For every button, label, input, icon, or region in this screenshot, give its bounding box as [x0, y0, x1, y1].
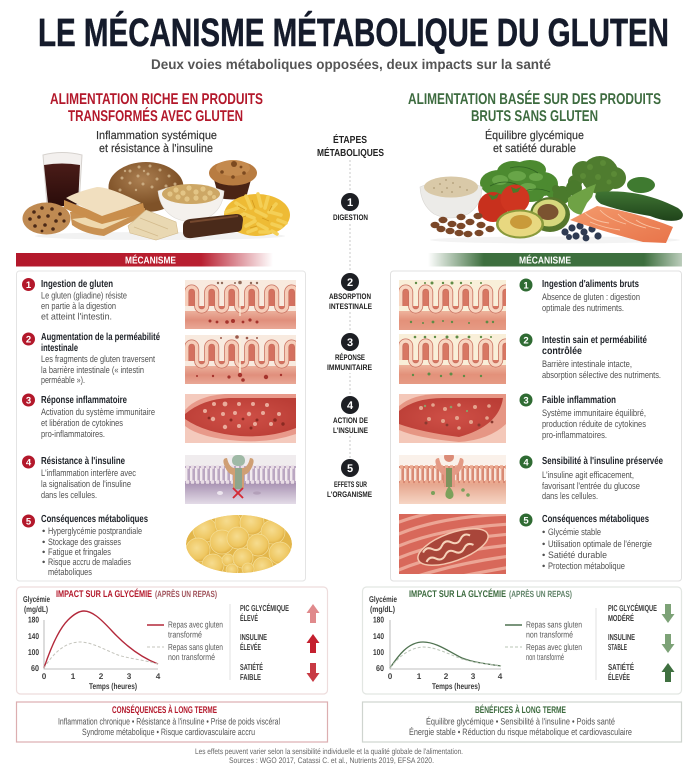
step 4 insulin action: ACTION DE: [333, 416, 369, 425]
step 5: metabolic consequences: Hyperglycémie postprandiale: [48, 525, 142, 536]
step 5: metabolic consequences: [520, 514, 652, 571]
line chart: glycemia curve: 0: [42, 672, 47, 681]
line chart: glycemia curve: 140: [28, 631, 39, 641]
step 3: inflammatory response: 3: [26, 396, 31, 406]
step 4: preserved insulin sensitivity: dans les cellules.: [542, 490, 598, 501]
chart legend: non transformé: [168, 652, 215, 662]
indicator: low satiety: SATIÉTÉ: [240, 662, 263, 672]
panel: gluten-free mechanism: [390, 271, 682, 586]
chart legend: [147, 620, 223, 662]
chart title: (APRÈS UN REPAS): [509, 589, 572, 599]
step 1 digestion: DIGESTION: [333, 213, 368, 222]
line chart: glycemia curve: 4: [156, 672, 161, 681]
step 3 immune response: IMMUNITAIRE: [327, 363, 373, 372]
indicator: moderate glycemic peak: PIC GLYCÉMIQUE: [608, 603, 657, 613]
step 4: preserved insulin sensitivity: Sensibilité à l'insuline préservée: [542, 456, 663, 467]
line chart: glycemia curve: 0: [388, 672, 393, 681]
indicator: stable insulin: INSULINE: [608, 632, 635, 642]
step 2: increased permeability: intestinale: [41, 343, 78, 354]
step 5 effects on the body: L'ORGANISME: [327, 490, 373, 499]
step 4 insulin action: 4: [347, 400, 354, 412]
step 3: low inflammation: 3: [523, 396, 529, 406]
line chart: glycemia curve: (mg/dL): [24, 604, 48, 614]
right mechanism banner: [428, 253, 682, 266]
chart title: (APRÈS UN REPAS): [155, 589, 217, 599]
line chart: glycemia curve: 100: [28, 647, 39, 657]
left column subheading: Inflammation systémique: [96, 129, 217, 142]
illustration: intact barrier: [399, 334, 511, 384]
step 3 immune response: RÉPONSE: [335, 352, 366, 362]
line chart: glycemia curve: 3: [127, 672, 132, 681]
step 2: increased permeability: [22, 332, 160, 385]
indicator: low satiety: FAIBLE: [240, 672, 261, 682]
chart legend: Repas sans gluten: [526, 620, 582, 630]
step 1: gluten ingestion: [22, 278, 127, 322]
step 3 immune response: [325, 332, 375, 373]
step 3: inflammatory response: et libération de cytokines: [41, 417, 123, 428]
right column subheading: et satiété durable: [493, 142, 576, 155]
line chart: glycemia curve: Temps (heures): [432, 681, 480, 691]
right mechanism banner: MÉCANISME: [519, 254, 571, 266]
indicator: high insulin: ÉLEVÉE: [240, 642, 261, 652]
line chart: glycemia curve: [23, 594, 223, 691]
step 4 insulin action: [325, 395, 375, 436]
step 4: preserved insulin sensitivity: favorisant l'entrée du glucose: [542, 480, 640, 491]
chart legend: Repas avec gluten: [526, 642, 582, 652]
indicator: high insulin: INSULINE: [240, 632, 267, 642]
step 3: low inflammation: Système immunitaire équilibré,: [542, 407, 646, 418]
step 1: whole foods: 1: [523, 280, 529, 292]
step 4: insulin resistance: L'inflammation interfère avec: [41, 467, 136, 478]
illustration: whole gluten-free foods: [420, 156, 683, 244]
step 4 insulin action: L'INSULINE: [333, 426, 369, 435]
step 4: insulin resistance: Résistance à l'insuline: [41, 456, 125, 467]
illustration: muscle with mitochondrion: [399, 514, 506, 574]
step 3 immune response: 3: [347, 337, 353, 349]
right column heading: BRUTS SANS GLUTEN: [471, 108, 598, 125]
indicator: high glycemic peak: PIC GLYCÉMIQUE: [240, 603, 289, 613]
illustration: processed foods with gluten: [22, 152, 290, 240]
step 5: metabolic consequences: •: [542, 538, 545, 549]
step 2: controlled permeability: [520, 334, 661, 380]
indicator: high satiety: SATIÉTÉ: [608, 662, 634, 672]
line chart: glycemia curve: 2: [444, 672, 449, 681]
step 5: metabolic consequences: •: [42, 525, 45, 536]
step 1: gluten ingestion: et atteint l'intestin.: [41, 310, 112, 322]
step 5 effects on the body: [325, 458, 375, 500]
step 5: metabolic consequences: •: [542, 549, 545, 560]
step 5 effects on the body: EFFETS SUR: [334, 480, 367, 489]
line chart: glycemia curve: 140: [373, 631, 384, 641]
steps column heading: MÉTABOLIQUES: [317, 146, 384, 159]
step 4: preserved insulin sensitivity: 4: [523, 458, 529, 468]
indicator: stable insulin: [608, 632, 674, 653]
step 5: metabolic consequences: •: [42, 536, 45, 547]
step 3: low inflammation: [520, 394, 646, 440]
left mechanism banner: MÉCANISME: [125, 254, 176, 266]
step 5 effects on the body: 5: [347, 463, 353, 475]
step 2: controlled permeability: Barrière intestinale intacte,: [542, 358, 632, 369]
callout: long-term consequences: [16, 702, 328, 742]
chart legend: Repas sans gluten: [168, 642, 223, 652]
callout: long-term benefits: BÉNÉFICES À LONG TERME: [475, 704, 566, 716]
step 1 digestion: 1: [347, 197, 353, 209]
callout: long-term consequences: Syndrome métabolique • Risque cardiovasculaire accru: [82, 727, 255, 737]
illustration: healthy villi with nutrients: [399, 280, 511, 330]
footer note and sources: [195, 747, 463, 765]
step 3: inflammatory response: Activation du système immunitaire: [41, 406, 155, 417]
callout: long-term consequences: Inflammation chronique • Résistance à l'insuline • Prise de poids viscéral: [58, 716, 280, 726]
step 5: metabolic consequences: Risque accru de maladies: [48, 556, 131, 567]
step 1: whole foods: optimale des nutriments.: [542, 302, 624, 313]
left column subheading: [96, 129, 217, 155]
step 5: metabolic consequences: Glycémie stable: [548, 526, 601, 537]
step 1 digestion: [325, 190, 375, 224]
step 2: increased permeability: Les fragments de gluten traversent: [41, 353, 155, 364]
illustration: fat cells: [186, 515, 292, 573]
step 1: gluten ingestion: Ingestion de gluten: [41, 279, 113, 290]
step 5: metabolic consequences: •: [42, 546, 45, 557]
step 4: preserved insulin sensitivity: [520, 456, 663, 501]
left column subheading: et résistance à l'insuline: [99, 142, 213, 155]
line chart: glycemia curve: 1: [71, 672, 76, 681]
callout: long-term benefits: Énergie stable • Réduction du risque métabolique et cardiovasculaire: [409, 727, 632, 737]
indicator: moderate glycemic peak: [608, 603, 674, 623]
illustration: villi with permeable barrier: [185, 335, 297, 384]
line chart: glycemia curve: 3: [471, 672, 476, 681]
step 4: insulin resistance: la signalisation de l'insuline: [41, 478, 131, 489]
step 5: metabolic consequences: Fatigue et fringales: [48, 546, 111, 557]
illustration: villi with gluten crossing: [185, 280, 297, 329]
step 2: controlled permeability: absorption sélective des nutriments.: [542, 369, 661, 380]
step 2: controlled permeability: contrôlée: [542, 346, 582, 357]
footer note and sources: Sources : WGO 2017, Catassi C. et al., Nutrients 2019, EFSA 2020.: [229, 756, 434, 765]
step 4: insulin resistance: [22, 456, 136, 500]
step 5: metabolic consequences: Conséquences métaboliques: [41, 514, 148, 525]
indicator: stable insulin: STABLE: [608, 642, 627, 652]
panel: glycemia impact without gluten: [362, 587, 682, 694]
step 5: metabolic consequences: Conséquences métaboliques: [542, 514, 649, 525]
chart legend: transformé: [168, 630, 202, 640]
line chart: glycemia curve: 60: [31, 663, 39, 673]
step 1: gluten ingestion: Le gluten (gliadine) résiste: [41, 290, 127, 300]
illustration: inflamed vessel: [185, 394, 296, 443]
right column subheading: Équilibre glycémique: [485, 128, 584, 142]
line chart: glycemia curve: 60: [376, 663, 384, 673]
step 2: increased permeability: 2: [26, 334, 31, 346]
step 5: metabolic consequences: Protection métabolique: [548, 560, 625, 571]
panel: glycemia impact with gluten: [16, 587, 328, 694]
step 1: gluten ingestion: en partie à la digestion: [41, 300, 116, 311]
step 5: metabolic consequences: Stockage des graisses: [48, 536, 121, 547]
indicator: high satiety: [608, 662, 674, 682]
step 4: preserved insulin sensitivity: L'insuline agit efficacement,: [542, 469, 634, 480]
step 3: inflammatory response: pro-inflammatoires.: [41, 428, 105, 439]
step 5: metabolic consequences: Satiété durable: [548, 549, 607, 560]
step 5: metabolic consequences: 5: [26, 516, 32, 528]
step 5: metabolic consequences: [22, 514, 148, 577]
left column heading: [50, 91, 263, 125]
line chart: glycemia curve: 2: [99, 672, 104, 681]
line chart: glycemia curve: [369, 594, 582, 691]
line chart: glycemia curve: 100: [373, 647, 384, 657]
center steps column: [317, 133, 384, 500]
step 5: metabolic consequences: métaboliques: [48, 566, 92, 577]
subtitle: Deux voies métaboliques opposées, deux impacts sur la santé: [151, 56, 551, 72]
steps column heading: ÉTAPES: [333, 133, 367, 146]
step 2: increased permeability: perméable »).: [41, 374, 85, 385]
illustration: working insulin receptor: [399, 452, 506, 504]
right column heading: [408, 90, 661, 125]
callout: long-term benefits: [362, 702, 682, 742]
line chart: glycemia curve: Glycémie: [369, 594, 397, 604]
indicator: high insulin: [240, 632, 320, 653]
step 3: low inflammation: Faible inflammation: [542, 395, 616, 406]
footer note and sources: Les effets peuvent varier selon la sensibilité individuelle et la qualité globale de l'alimentation.: [195, 747, 463, 756]
step 5: metabolic consequences: •: [542, 526, 545, 537]
left column heading: ALIMENTATION RICHE EN PRODUITS: [50, 91, 263, 108]
step 2: controlled permeability: 2: [523, 336, 529, 346]
callout: long-term benefits: Équilibre glycémique • Sensibilité à l'insuline • Poids santé: [426, 716, 615, 726]
step 2: controlled permeability: Intestin sain et perméabilité: [542, 335, 647, 346]
chart legend: [505, 620, 582, 662]
step 1: whole foods: Ingestion d'aliments bruts: [542, 279, 639, 290]
steps column heading: [317, 133, 384, 159]
step 1: whole foods: Absence de gluten : digestion: [542, 291, 640, 302]
line chart: glycemia curve: 1: [417, 672, 422, 681]
chart legend: non transformé: [526, 630, 573, 640]
left column heading: TRANSFORMÉS AVEC GLUTEN: [68, 107, 243, 125]
step 2 intestinal absorption: ABSORPTION: [329, 292, 371, 301]
step 3: inflammatory response: [22, 394, 155, 439]
step 4: insulin resistance: 4: [26, 458, 32, 468]
panel: gluten mechanism: [16, 271, 306, 581]
indicator: high satiety: ÉLEVÉE: [608, 672, 630, 682]
step 5: metabolic consequences: •: [542, 560, 545, 571]
chart legend: non transformé: [526, 652, 564, 662]
indicator: high glycemic peak: ÉLEVÉ: [240, 613, 258, 623]
step 2: increased permeability: la barrière intestinale (« intestin: [41, 364, 144, 375]
step 1: gluten ingestion: 1: [26, 280, 32, 291]
step 1: whole foods: [520, 278, 640, 313]
step 3: low inflammation: pro-inflammatoires.: [542, 429, 607, 440]
step 3: low inflammation: production réduite de cytokines: [542, 418, 646, 429]
indicator: moderate glycemic peak: MODÉRÉ: [608, 613, 634, 623]
step 4: insulin resistance: dans les cellules.: [41, 489, 97, 500]
step 2 intestinal absorption: [325, 271, 375, 311]
chart title: IMPACT SUR LA GLYCÉMIE: [56, 588, 152, 600]
chart title: IMPACT SUR LA GLYCÉMIE: [409, 588, 506, 600]
chart legend: Repas avec gluten: [168, 620, 223, 630]
indicator: high glycemic peak: [240, 603, 320, 623]
step 5: metabolic consequences: •: [42, 556, 45, 567]
right column subheading: [485, 128, 584, 155]
step 2: increased permeability: Augmentation de la perméabilité: [41, 332, 160, 343]
line chart: glycemia curve: 180: [373, 614, 384, 624]
step 5: metabolic consequences: Utilisation optimale de l'énergie: [548, 538, 652, 549]
line chart: glycemia curve: 4: [498, 672, 503, 681]
callout: long-term consequences: CONSÉQUENCES À LONG TERME: [112, 704, 217, 716]
line chart: glycemia curve: Temps (heures): [89, 681, 137, 691]
illustration: calm vessel: [399, 394, 506, 443]
step 3: inflammatory response: Réponse inflammatoire: [41, 395, 127, 406]
left mechanism banner: [16, 253, 273, 266]
line chart: glycemia curve: 180: [28, 614, 39, 624]
line chart: glycemia curve: Glycémie: [23, 594, 50, 604]
step 2 intestinal absorption: 2: [347, 277, 353, 289]
indicator: low satiety: [240, 662, 320, 682]
line chart: glycemia curve: (mg/dL): [370, 604, 395, 614]
step 2 intestinal absorption: INTESTINALE: [329, 302, 373, 311]
illustration: blocked insulin receptor: [185, 455, 296, 504]
step 5: metabolic consequences: 5: [523, 516, 529, 526]
